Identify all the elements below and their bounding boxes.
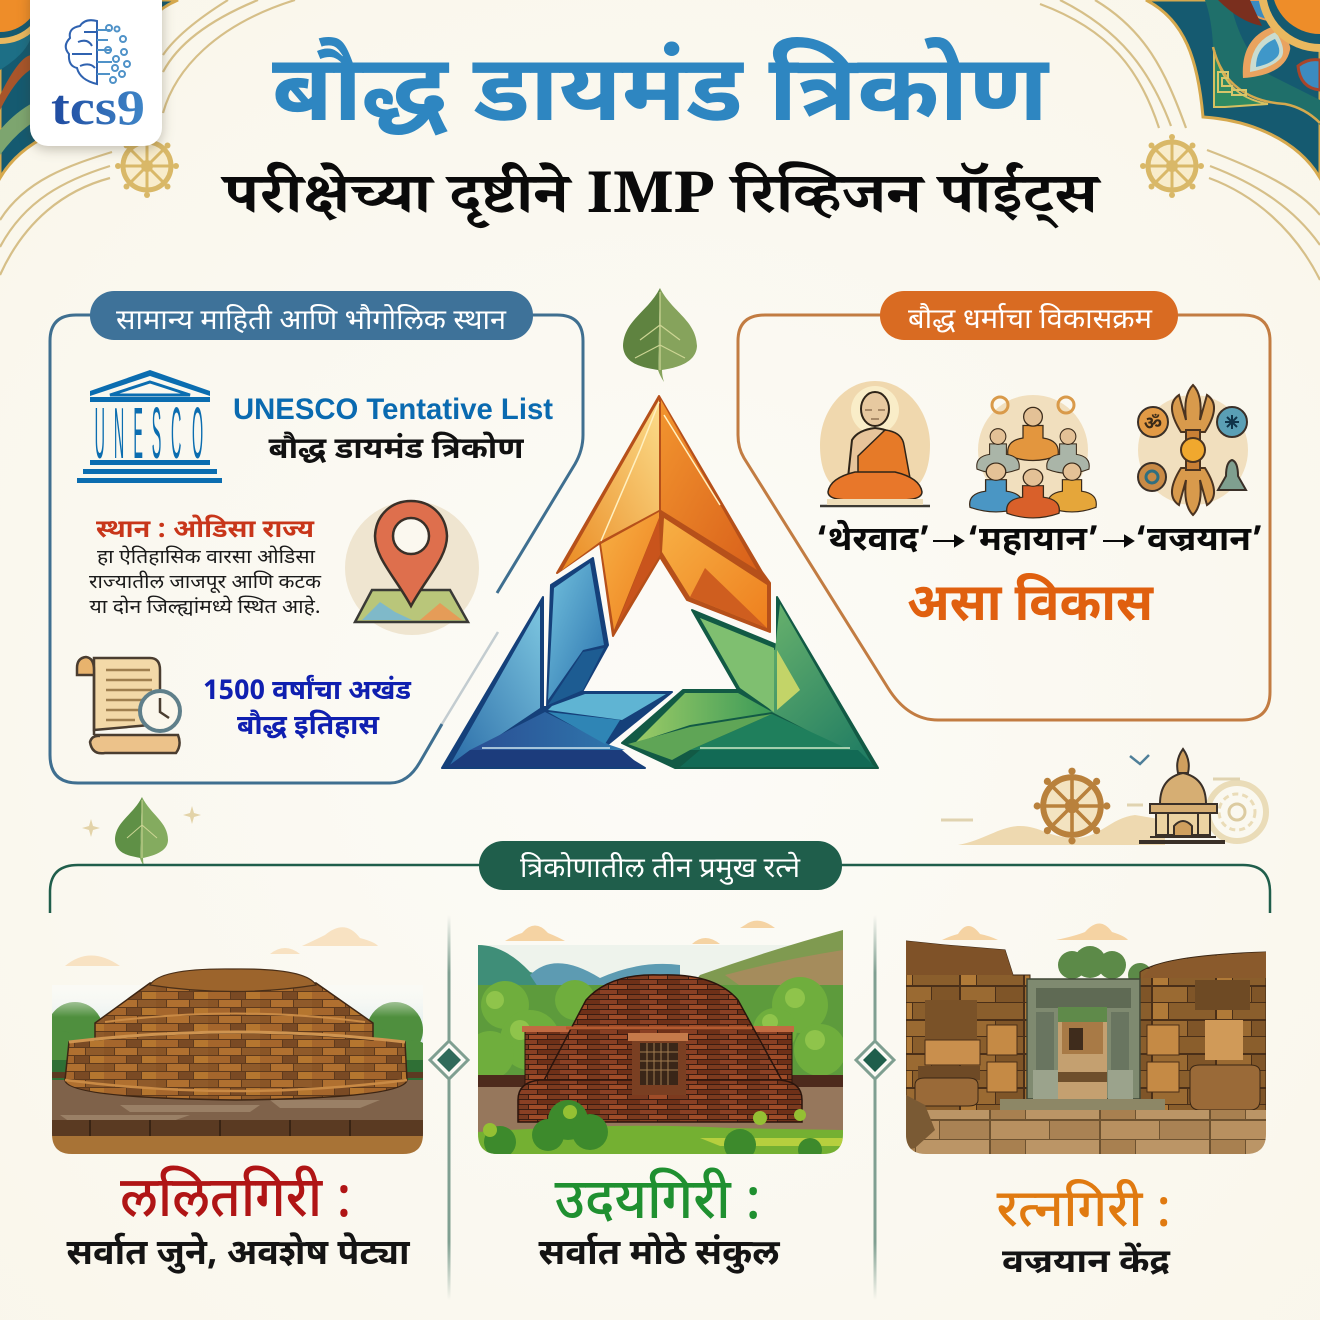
history text: बौद्ध इतिहास (237, 710, 380, 746)
icon: Mahayana group (970, 395, 1096, 518)
picture: Lalitgiri stupa (36, 927, 434, 1156)
caption: Ratnagiri: वज्रयान केंद्र (1002, 1242, 1170, 1286)
panel outline (50, 315, 583, 783)
UNESCO tentative list text (233, 393, 553, 471)
panel heading pill (90, 291, 533, 341)
evolution caption: असा विकास (907, 574, 1155, 642)
icon: Theravada monk (820, 381, 930, 506)
arrow: Theravada to Mahayana (933, 536, 963, 546)
subtitle: परीक्षेच्या दृष्टीने IMP रिव्हिजन पॉईंट्स (220, 160, 1101, 247)
caption: Udayagiri: उदयगिरी : (554, 1168, 762, 1241)
location text block: हा ऐतिहासिक वारसा ओडिसा (97, 545, 316, 571)
Buddhism evolution sequence: ‘महायान’ (967, 520, 1099, 564)
caption: Ratnagiri (996, 1180, 1172, 1286)
icon: stupa and wheel scene (941, 749, 1266, 845)
decorative gold lines (0, 0, 1320, 280)
picture: Udayagiri stupa (466, 921, 846, 1162)
logo wordmark: tcs9 (51, 79, 145, 135)
icon: right dharma wheel (1140, 134, 1204, 198)
icon: scroll with clock (77, 657, 180, 753)
icon: brain (66, 20, 130, 84)
Buddhism evolution sequence: ‘थेरवाद’ (816, 519, 930, 564)
section heading pill: त्रिकोणातील तीन प्रमुख रत्ने (520, 851, 800, 889)
title: बौद्ध डायमंड त्रिकोण (272, 38, 1050, 158)
divider with diamond: right (856, 915, 894, 1300)
caption: Udayagiri: सर्वात मोठे संकुल (538, 1232, 780, 1279)
caption: Ratnagiri: रत्नगिरी : (996, 1180, 1172, 1248)
icon: left dharma wheel (115, 134, 179, 198)
caption: Lalitgiri (66, 1166, 410, 1279)
location text block: या दोन जिल्ह्यांमध्ये स्थित आहे. (90, 595, 320, 621)
divider with diamond: left (430, 915, 468, 1300)
icon: UNESCO temple logo: UNESCO (95, 394, 203, 475)
UNESCO tentative list text: बौद्ध डायमंड त्रिकोण (268, 431, 524, 471)
icon: UNESCO temple logo (77, 370, 222, 483)
caption: Udayagiri (538, 1168, 780, 1279)
history text (203, 674, 412, 746)
caption: Lalitgiri: ललितगिरी : (120, 1166, 352, 1239)
icon: lower bodhi leaf (82, 797, 201, 866)
section: three main gems (36, 841, 1270, 1300)
section heading pill (479, 841, 842, 890)
caption: Lalitgiri: सर्वात जुने, अवशेष पेट्या (66, 1232, 410, 1279)
UNESCO tentative list text: UNESCO Tentative List (233, 393, 553, 426)
panel outline (738, 315, 1270, 720)
green gem (622, 597, 878, 768)
location text block: राज्यातील जाजपूर आणि कटक (89, 571, 321, 596)
blue gem (442, 558, 672, 768)
Buddhism evolution sequence (816, 519, 1263, 564)
picture: Ratnagiri ruins (906, 924, 1266, 1156)
corner ornament: top right (1146, 0, 1320, 178)
icon: Vajrayana vajra with symbols (1138, 385, 1248, 515)
corner ornament: top left (0, 0, 178, 178)
panel heading pill (880, 291, 1178, 340)
location text block (89, 514, 321, 621)
chart: gem triangle (442, 396, 878, 768)
history text: 1500 वर्षांचा अखंड (203, 674, 412, 711)
icon: Vajrayana vajra with symbols: ॐ (1144, 413, 1162, 437)
panel: evolution of Buddhism (738, 291, 1270, 720)
panel heading pill: सामान्य माहिती आणि भौगोलिक स्थान (116, 303, 506, 341)
icon: map pin (345, 501, 479, 635)
panel heading pill: बौद्ध धर्माचा विकासक्रम (908, 302, 1153, 340)
icon: top bodhi leaf (623, 288, 697, 382)
panel: general info and location (50, 291, 583, 783)
Buddhism evolution sequence: ‘वज्रयान’ (1135, 520, 1263, 564)
section frame (50, 865, 1270, 913)
orange gem (557, 396, 770, 636)
location text block: स्थान : ओडिसा राज्य (96, 514, 315, 548)
logo card (30, 0, 162, 146)
arrow: Mahayana to Vajrayana (1103, 536, 1133, 546)
